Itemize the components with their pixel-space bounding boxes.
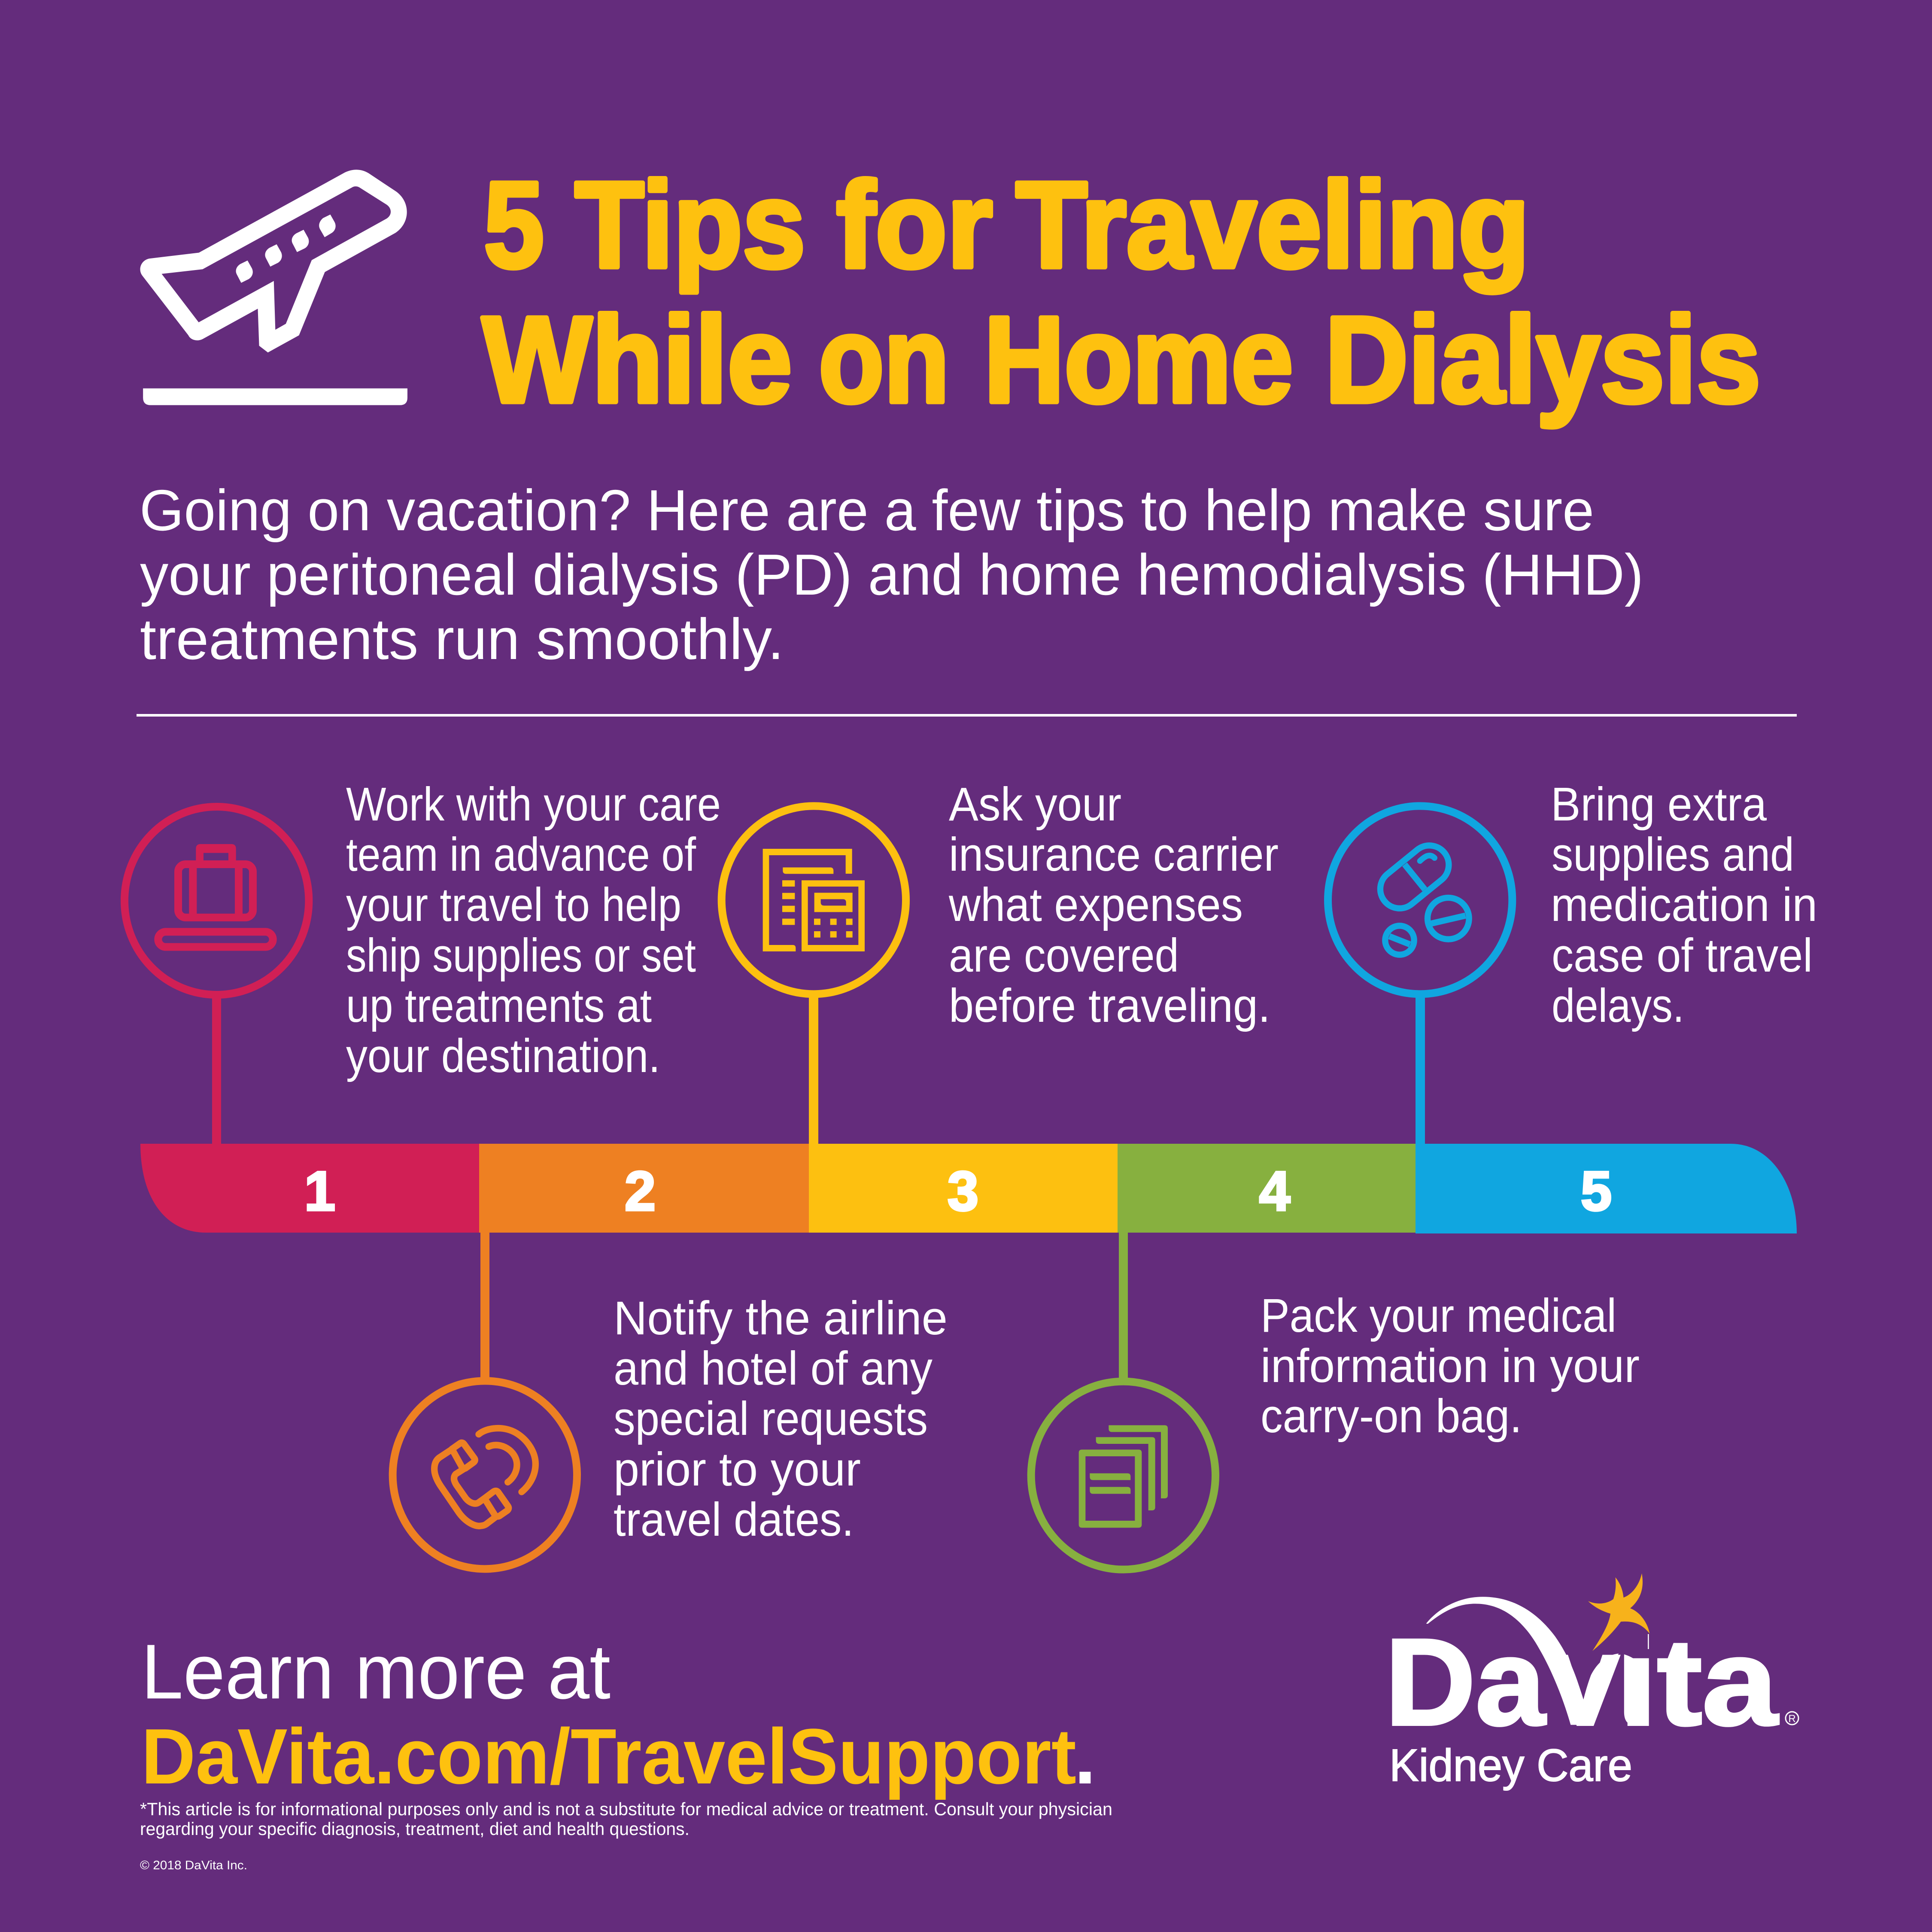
tip 3 text: insurance carrier — [949, 828, 1279, 881]
tip 3 text: what expenses — [948, 878, 1243, 931]
title: Tips — [575, 157, 805, 294]
tip 1 text: your destination. — [346, 1030, 660, 1082]
tip 2 text — [614, 1292, 948, 1546]
tip 2 text: special requests — [614, 1392, 928, 1445]
title: 5 — [484, 157, 544, 293]
segment 3: 3 — [948, 1160, 978, 1222]
intro text: Going on vacation? Here are a few tips to help make sure — [140, 478, 1594, 543]
tip 2 text: and hotel of any — [614, 1342, 933, 1395]
tip 3 text: before traveling. — [949, 979, 1270, 1032]
disclaimer — [140, 1799, 1112, 1839]
segment 4: 4 — [1259, 1160, 1290, 1222]
registered mark: R — [1788, 1713, 1796, 1725]
title: on — [819, 292, 949, 428]
title: Home — [984, 292, 1293, 428]
tip 3 text — [948, 778, 1279, 1032]
call to action: Learn more at — [141, 1628, 611, 1715]
segment 5 — [1416, 1144, 1797, 1233]
call to action: . — [1074, 1712, 1096, 1800]
title: for — [836, 157, 993, 293]
tip 1 text: ship supplies or set — [346, 929, 696, 982]
tip 3 text: Ask your — [949, 778, 1121, 831]
tip 3 text: are covered — [949, 929, 1179, 982]
tip 2: telephone icon and stem — [393, 1232, 577, 1569]
logo wordmark: ita — [1619, 1613, 1778, 1751]
logo tagline: Kidney Care — [1389, 1740, 1632, 1791]
tip 1 text — [346, 778, 721, 1082]
intro text: your peritoneal dialysis (PD) and home hemodialysis (HHD) — [140, 542, 1643, 607]
timeline bar — [140, 1144, 1797, 1233]
tip 2 text: Notify the airline — [614, 1292, 948, 1345]
call to action: DaVita.com/TravelSupport — [141, 1712, 1076, 1800]
icon: airplane taking off — [140, 170, 407, 405]
title — [482, 157, 1761, 428]
logo wordmark: V — [1551, 1635, 1619, 1746]
segment 3 — [809, 1144, 1118, 1233]
copyright: © 2018 DaVita Inc. — [140, 1859, 247, 1872]
tip 4 text: information in your — [1261, 1340, 1640, 1392]
registered mark — [1786, 1712, 1798, 1725]
logo i stem — [1624, 1654, 1644, 1725]
tip 4 text: carry-on bag. — [1261, 1390, 1522, 1443]
tip 1 text: Work with your care — [346, 778, 721, 831]
tip 5: pills icon and stem — [1328, 806, 1512, 1145]
tip 5 text: delays. — [1552, 979, 1684, 1032]
title: Dialysis — [1325, 292, 1761, 428]
title: While — [482, 292, 792, 428]
tip 5 text — [1551, 778, 1817, 1032]
tip 2 text: travel dates. — [614, 1493, 854, 1546]
tip 1 text: up treatments at — [346, 979, 652, 1032]
logo swoosh — [1426, 1597, 1619, 1725]
intro text: treatments run smoothly. — [140, 607, 784, 671]
tip 2 text: prior to your — [614, 1443, 861, 1496]
disclaimer: regarding your specific diagnosis, treatment, diet and health questions. — [140, 1819, 690, 1839]
tip 4 text — [1261, 1289, 1640, 1443]
tip 5 text: medication in — [1551, 878, 1817, 931]
title: Traveling — [1016, 157, 1530, 294]
segment 4 — [1118, 1144, 1416, 1233]
disclaimer: *This article is for informational purposes only and is not a substitute for medical advice or treatment. Consult your physician — [140, 1799, 1112, 1819]
segment 2 — [479, 1144, 809, 1233]
logo star — [1588, 1574, 1649, 1651]
tip 5 text: supplies and — [1552, 828, 1794, 881]
DaVita Kidney Care logo — [1385, 1574, 1798, 1791]
tip 3: calculator icon and stem — [722, 806, 906, 1145]
tip 5 text: case of travel — [1552, 929, 1813, 982]
call to action — [141, 1628, 1096, 1800]
segment 5: 5 — [1581, 1160, 1612, 1222]
tip 4 text: Pack your medical — [1261, 1289, 1616, 1342]
tip 4: documents icon and stem — [1031, 1232, 1215, 1570]
segment 1 — [140, 1144, 479, 1233]
intro text — [140, 478, 1643, 671]
tip 1 text: team in advance of — [346, 828, 696, 881]
segment 1: 1 — [304, 1160, 335, 1222]
logo wordmark: Da — [1385, 1613, 1546, 1751]
tip 5 text: Bring extra — [1551, 778, 1767, 831]
tip 1: luggage icon and stem — [125, 807, 309, 1145]
segment 2: 2 — [625, 1160, 656, 1222]
tip 1 text: your travel to help — [346, 878, 681, 931]
